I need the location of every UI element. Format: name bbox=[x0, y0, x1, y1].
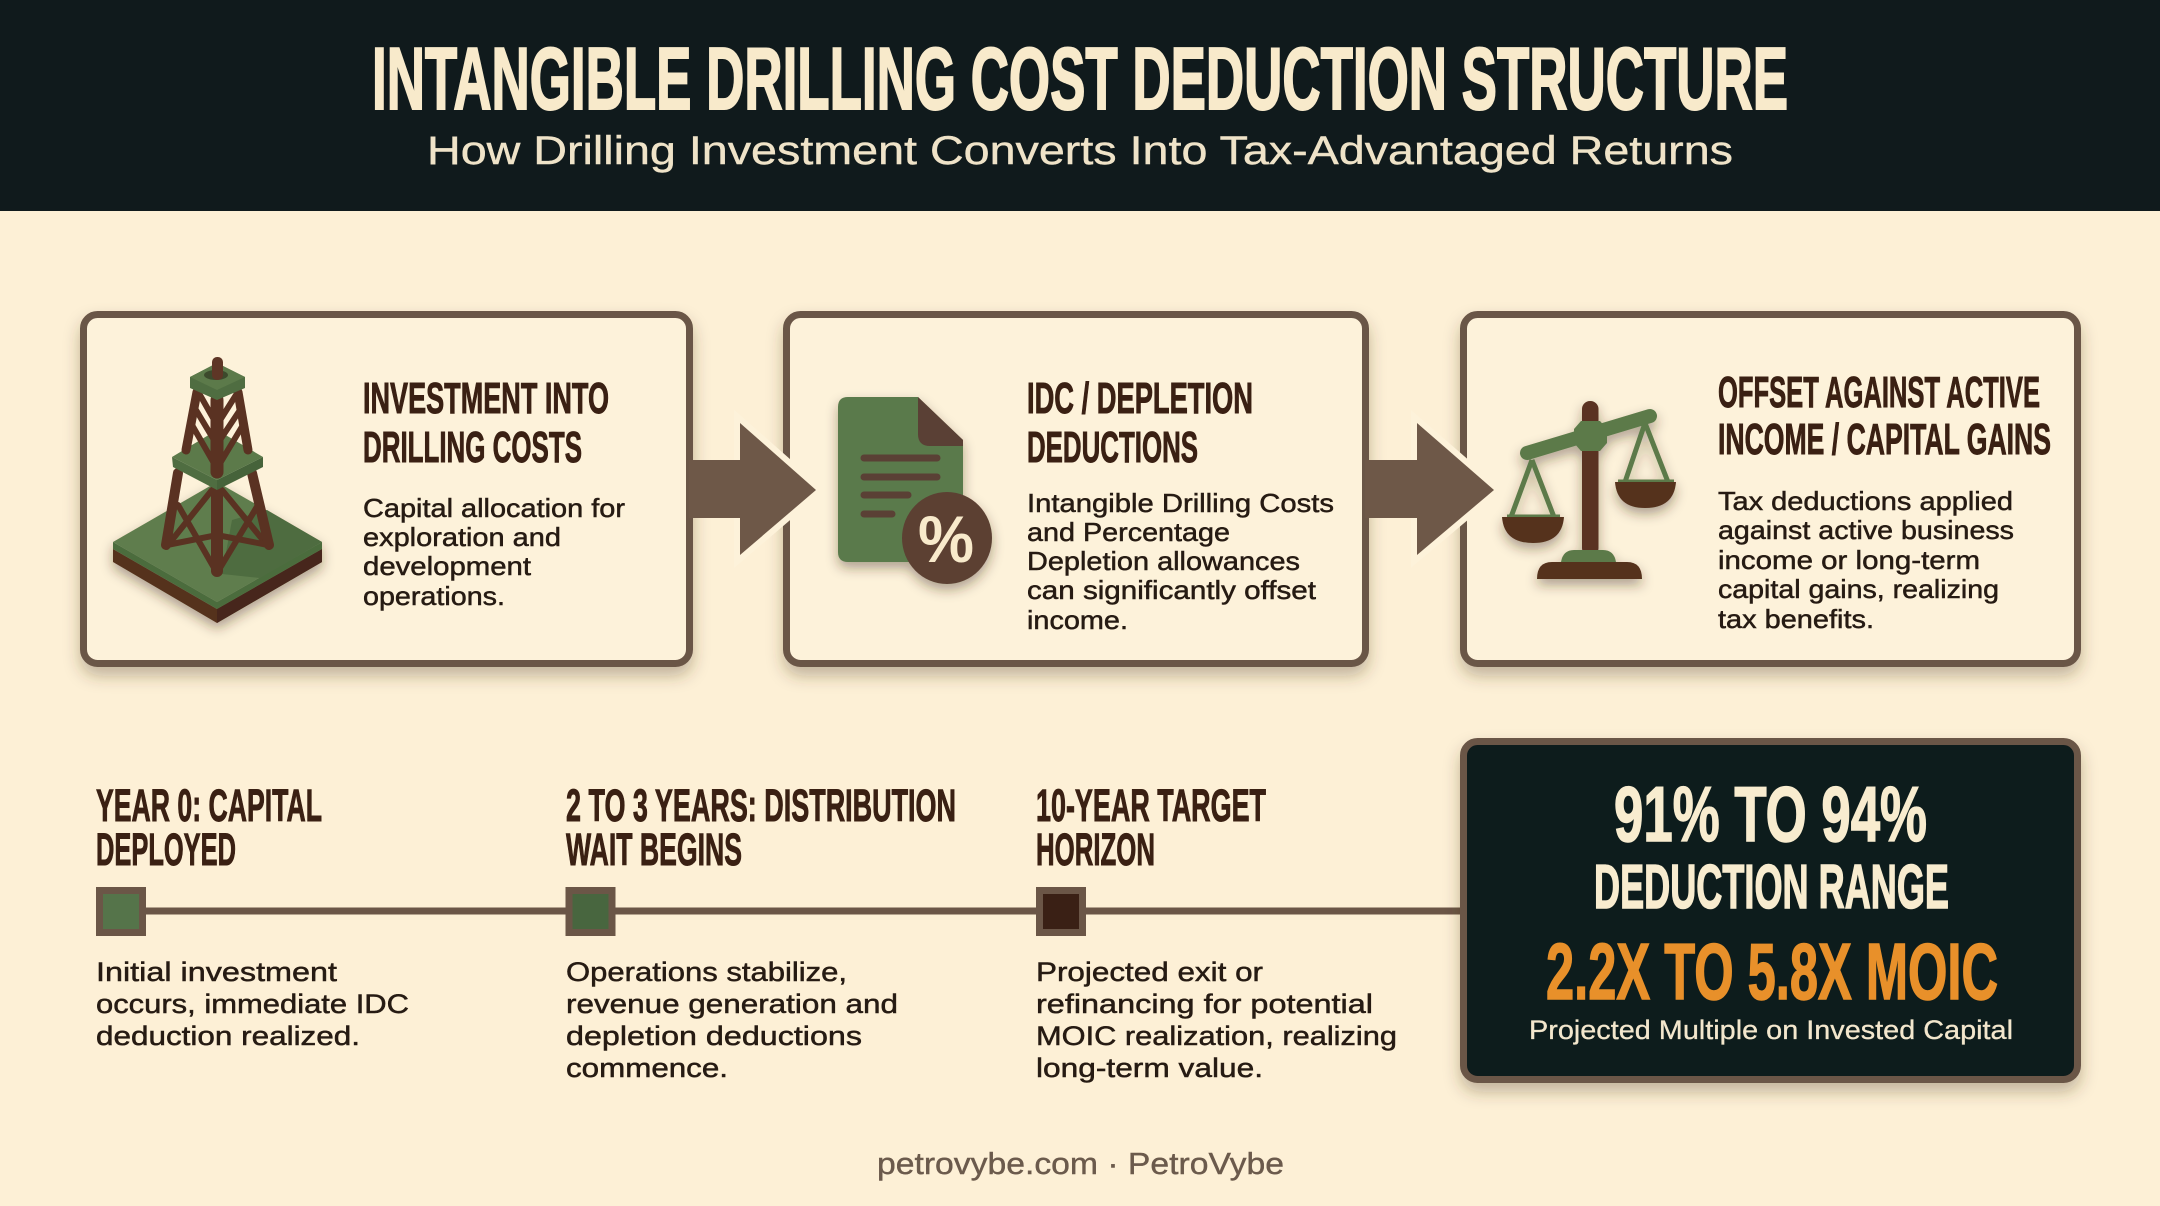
timeline step: year 0 bbox=[96, 780, 409, 1051]
panel: idc depletion deductions bbox=[786, 314, 1366, 664]
heading bbox=[363, 374, 609, 472]
heading bbox=[566, 780, 956, 875]
description: occurs, immediate IDC bbox=[96, 989, 409, 1019]
heading bbox=[96, 780, 322, 875]
description: development bbox=[363, 551, 532, 581]
panel: deduction range and moic callout bbox=[1464, 742, 2078, 1080]
arrow: deductions to offset bbox=[1365, 423, 1494, 555]
description: exploration and bbox=[363, 522, 561, 552]
description bbox=[363, 493, 625, 611]
description: Depletion allowances bbox=[1027, 546, 1300, 576]
heading: DEDUCTIONS bbox=[1027, 423, 1198, 472]
heading: IDC / DEPLETION bbox=[1027, 374, 1253, 423]
description: capital gains, realizing bbox=[1718, 574, 1999, 604]
description: tax benefits. bbox=[1718, 604, 1874, 634]
description: income or long-term bbox=[1718, 545, 1980, 575]
description: commence. bbox=[566, 1053, 728, 1083]
node bbox=[100, 890, 142, 932]
description: Intangible Drilling Costs bbox=[1027, 488, 1334, 518]
description: income. bbox=[1027, 605, 1128, 635]
moic caption: Projected Multiple on Invested Capital bbox=[1529, 1015, 2013, 1045]
timeline line bbox=[120, 908, 1465, 914]
description bbox=[96, 957, 409, 1051]
heading: YEAR 0: CAPITAL bbox=[96, 780, 322, 831]
description: and Percentage bbox=[1027, 517, 1230, 547]
heading bbox=[1036, 780, 1266, 875]
subtitle: How Drilling Investment Converts Into Tax-Advantaged Returns bbox=[427, 129, 1733, 173]
icon: document with percent badge bbox=[838, 397, 992, 584]
node bbox=[569, 890, 612, 932]
heading: HORIZON bbox=[1036, 824, 1155, 875]
description: deduction realized. bbox=[96, 1021, 360, 1051]
heading: WAIT BEGINS bbox=[566, 824, 742, 875]
icon: balance scales bbox=[1502, 401, 1676, 579]
description bbox=[566, 957, 898, 1083]
timeline step: 10-year target bbox=[1036, 780, 1397, 1083]
footer: petrovybe.com · PetroVybe bbox=[877, 1146, 1284, 1181]
description: Operations stabilize, bbox=[566, 957, 847, 987]
timeline step: 2 to 3 years bbox=[566, 780, 956, 1083]
description: operations. bbox=[363, 581, 505, 611]
arrow: investment to deductions bbox=[689, 423, 816, 555]
heading: 2 TO 3 YEARS: DISTRIBUTION bbox=[566, 780, 956, 831]
description: can significantly offset bbox=[1027, 575, 1317, 605]
deduction percentage: 91% TO 94% bbox=[1614, 770, 1927, 858]
node bbox=[1040, 890, 1082, 932]
panel: investment into drilling costs bbox=[84, 314, 690, 664]
description: revenue generation and bbox=[566, 989, 898, 1019]
heading: 10-YEAR TARGET bbox=[1036, 780, 1266, 831]
description bbox=[1718, 486, 2014, 634]
description: Initial investment bbox=[96, 957, 338, 987]
description: depletion deductions bbox=[566, 1021, 862, 1051]
description: against active business bbox=[1718, 515, 2014, 545]
header band bbox=[0, 0, 2160, 211]
description bbox=[1036, 957, 1397, 1083]
description: Tax deductions applied bbox=[1718, 486, 2013, 516]
heading: DEPLOYED bbox=[96, 824, 236, 875]
description bbox=[1027, 488, 1334, 635]
heading: INVESTMENT INTO bbox=[363, 374, 609, 423]
heading bbox=[1718, 368, 2051, 464]
description: long-term value. bbox=[1036, 1053, 1263, 1083]
description: MOIC realization, realizing bbox=[1036, 1021, 1397, 1051]
description: refinancing for potential bbox=[1036, 989, 1373, 1019]
description: Projected exit or bbox=[1036, 957, 1263, 987]
panel: offset against active income bbox=[1464, 314, 2078, 664]
icon: drilling derrick bbox=[113, 357, 322, 623]
heading bbox=[1027, 374, 1253, 472]
icon: document with percent badge: % bbox=[918, 502, 974, 576]
description: Capital allocation for bbox=[363, 493, 625, 523]
heading: DRILLING COSTS bbox=[363, 423, 582, 472]
